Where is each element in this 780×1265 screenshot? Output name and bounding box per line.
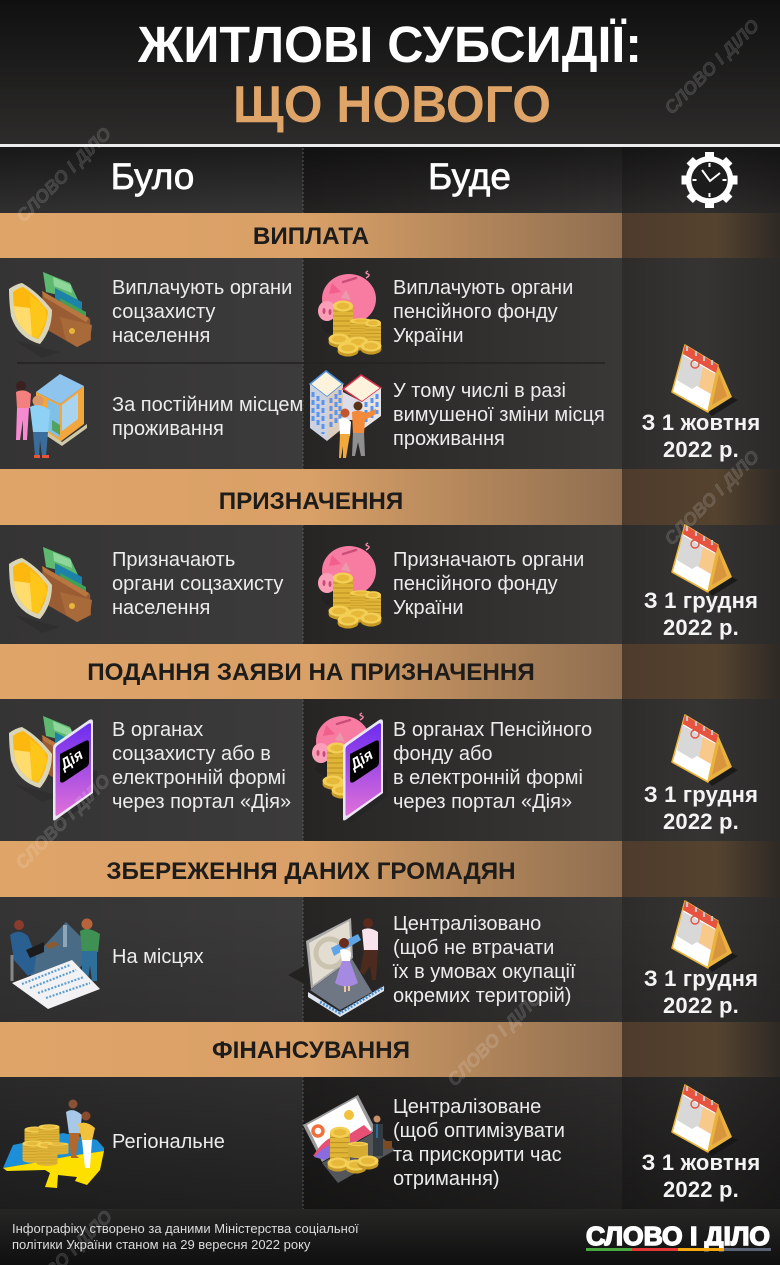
date: from 1 October: 2022 р. xyxy=(663,437,739,462)
icon: calendar xyxy=(672,1085,738,1156)
text: by permanent residence: За постійним місцем xyxy=(112,394,303,416)
header panel xyxy=(0,0,780,145)
date: from 1 October: 2022 р. xyxy=(663,1177,739,1202)
text: apply at pension fund or Diia: в електронній формі xyxy=(393,767,583,789)
header rule xyxy=(0,144,780,147)
text: centralized storage: їх в умовах окупації xyxy=(392,961,576,983)
text: paid by pension fund: України xyxy=(393,325,464,347)
icon: laptop with people xyxy=(288,918,384,1017)
band: data storage: ЗБЕРЕЖЕННЯ ДАНИХ ГРОМАДЯН xyxy=(106,858,516,885)
text: centralized storage: окремих територій) xyxy=(393,985,571,1007)
text: paid by social protection: соцзахисту xyxy=(112,301,215,323)
band: financing xyxy=(0,1022,780,1077)
text: assigned by social protection: населення xyxy=(112,597,210,619)
text: assigned by social protection: органи соцзахисту xyxy=(112,573,283,595)
icon: shield and wallet xyxy=(9,547,92,633)
icon: piggy bank xyxy=(318,271,382,356)
footer panel xyxy=(0,1209,780,1265)
band: application xyxy=(0,644,780,699)
text: by permanent residence: проживання xyxy=(112,418,224,440)
text: assigned by pension fund: Призначають органи xyxy=(393,549,584,571)
text: centralized financing: Централізоване xyxy=(393,1096,541,1118)
band: assignment xyxy=(0,469,780,525)
source note: Інфографіку створено за даними Міністерства соціальної xyxy=(12,1221,359,1236)
logo: СЛОВО І ДІЛО xyxy=(586,1221,770,1251)
text: paid by pension fund: Виплачують органи xyxy=(393,277,573,299)
text: apply at social protection or Diia: В органах xyxy=(112,719,203,741)
icon: houses and displaced family xyxy=(310,371,381,458)
watermarks: СЛОВО І ДІЛО xyxy=(443,987,546,1090)
icon: calendar xyxy=(672,901,738,972)
text: centralized financing: отримання) xyxy=(393,1168,500,1190)
band: financing: ФІНАНСУВАННЯ xyxy=(212,1037,410,1064)
title: ЖИТЛОВІ СУБСИДІЇ: xyxy=(137,16,642,73)
text: paid by pension fund: пенсійного фонду xyxy=(393,301,558,323)
text: including forced relocation: проживання xyxy=(393,428,505,450)
icon: piggy bank xyxy=(318,543,382,628)
band: application: ПОДАННЯ ЗАЯВИ НА ПРИЗНАЧЕННЯ xyxy=(87,659,535,686)
text: centralized storage: (щоб не втрачати xyxy=(393,937,554,959)
text: assigned by pension fund: пенсійного фонду xyxy=(393,573,558,595)
band: data storage xyxy=(0,841,780,897)
source note: політики України станом на 29 вересня 2022 року xyxy=(12,1237,311,1252)
title: ЩО НОВОГО xyxy=(233,76,551,134)
text: including forced relocation: вимушеної зміни місця xyxy=(393,404,605,426)
text: apply at social protection or Diia: електронній формі xyxy=(112,767,286,789)
date: from 1 October: З 1 жовтня xyxy=(642,410,760,435)
icon: people and apartment building xyxy=(16,374,87,458)
text: assigned by pension fund: України xyxy=(393,597,464,619)
text: apply at social protection or Diia: соцзахисту або в xyxy=(112,743,271,765)
date: from 1 December: З 1 грудня xyxy=(644,966,758,991)
row divider xyxy=(17,362,605,364)
title xyxy=(137,16,642,134)
text: apply at pension fund or Diia: фонду або xyxy=(393,743,493,765)
watermarks: СЛОВО І ДІЛО xyxy=(660,15,763,118)
column heading: before: Було xyxy=(111,156,194,197)
text: paid by social protection: Виплачують органи xyxy=(112,277,292,299)
icon: gear clock xyxy=(682,152,738,208)
text: centralized financing: (щоб оптимізувати xyxy=(393,1120,565,1142)
icon: shield, wallet and Diia phone xyxy=(9,716,97,824)
text: centralized storage: Централізовано xyxy=(393,913,541,935)
icon: shield and wallet xyxy=(9,272,92,358)
icon: piggy bank and Diia phone xyxy=(312,713,387,824)
text: apply at pension fund or Diia: через портал «Дія» xyxy=(393,791,572,813)
text: apply at pension fund or Diia: В органах Пенсійного xyxy=(393,719,592,741)
watermarks: СЛОВО І ДІЛО xyxy=(660,446,763,549)
text: assigned by social protection: Призначають xyxy=(112,549,235,571)
watermarks: СЛОВО І ДІЛО xyxy=(11,770,114,873)
icon: calendar xyxy=(672,345,738,416)
icon: calendar xyxy=(672,715,738,786)
band: assignment: ПРИЗНАЧЕННЯ xyxy=(219,488,403,515)
watermarks: СЛОВО І ДІЛО xyxy=(12,123,115,226)
icon: laptop with chart and coins xyxy=(303,1095,395,1183)
icon: office consultation xyxy=(10,918,100,1009)
date: from 1 December: З 1 грудня xyxy=(644,588,758,613)
text: locally: На місцях xyxy=(112,946,204,968)
date: from 1 December: 2022 р. xyxy=(663,615,739,640)
text: regional: Регіональне xyxy=(112,1131,225,1153)
band: payment xyxy=(0,213,780,258)
column heading: after: Буде xyxy=(428,156,511,197)
date: from 1 December: 2022 р. xyxy=(663,809,739,834)
text: including forced relocation: У тому числі в разі xyxy=(393,380,566,402)
text: paid by social protection: населення xyxy=(112,325,210,347)
date: from 1 December: 2022 р. xyxy=(663,993,739,1018)
icon: Ukraine map with coins and people xyxy=(3,1100,104,1188)
text: apply at social protection or Diia: через портал «Дія» xyxy=(112,791,291,813)
icon: calendar xyxy=(672,525,738,596)
date: from 1 December: З 1 грудня xyxy=(644,782,758,807)
text: centralized financing: та прискорити час xyxy=(393,1144,562,1166)
date: from 1 October: З 1 жовтня xyxy=(642,1150,760,1175)
band: payment: ВИПЛАТА xyxy=(253,223,369,250)
